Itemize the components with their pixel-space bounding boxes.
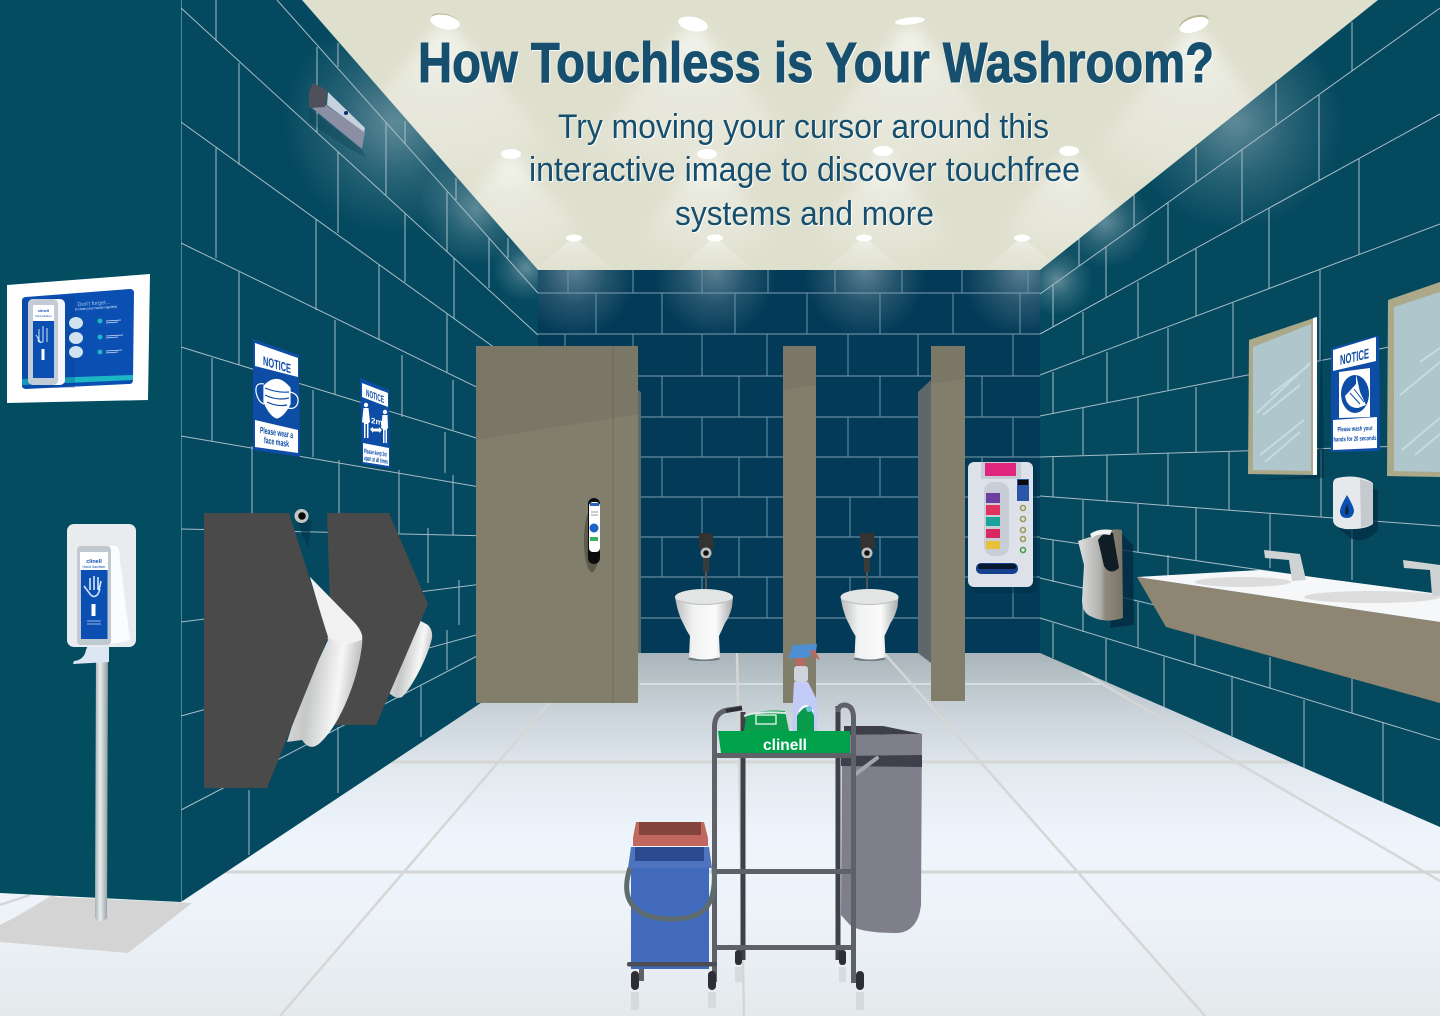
cubicle right side panel and post	[918, 346, 965, 701]
ceiling lights	[429, 11, 1210, 241]
subtitle	[529, 108, 1080, 233]
front wheels	[856, 971, 864, 990]
poster: wash your hands notice	[1331, 335, 1380, 452]
right wall	[1021, 0, 1440, 827]
toilet 2	[840, 533, 898, 661]
laundry bag	[841, 726, 922, 933]
poster: wear a face mask notice	[253, 339, 300, 457]
poster: keep 2m apart notice	[360, 378, 390, 468]
poster: hand hygiene wall poster	[7, 274, 150, 403]
icon: washing hands	[1339, 368, 1370, 418]
bucket handle	[627, 868, 714, 919]
small clinell bottle	[797, 706, 814, 731]
flush valve	[699, 533, 714, 591]
urinal sensor	[294, 509, 312, 548]
poster: wash your hands notice: Please wash your	[1338, 425, 1373, 433]
urinal 2	[388, 620, 432, 698]
red tray	[633, 822, 708, 846]
urinal partition 1	[204, 513, 328, 788]
toilet 1	[675, 533, 733, 661]
ceiling	[302, 0, 1378, 285]
tap 2	[1403, 560, 1440, 596]
hand dryer	[1078, 529, 1134, 628]
floor reflections under wheels	[631, 967, 864, 1010]
floor	[0, 653, 1440, 1016]
poster: hand hygiene wall poster: Hand Sanitiser	[35, 315, 52, 318]
mirror 2	[1387, 282, 1440, 477]
poster: hand hygiene wall poster: to clean your hands regularly	[75, 305, 118, 311]
dispenser body	[67, 524, 136, 647]
mop bucket	[627, 822, 717, 990]
cubicle door	[476, 346, 638, 703]
hand sanitiser dispenser on stand: Hand Sanitiser	[83, 565, 106, 569]
paper towel soap dispenser	[1333, 477, 1378, 540]
poster: wear a face mask notice: Please wear a	[260, 425, 294, 440]
pole	[95, 655, 108, 922]
drip tray	[73, 645, 109, 664]
subtitle: Try moving your cursor around this	[558, 108, 1049, 146]
spray bottle	[788, 644, 820, 731]
front pillar wall	[0, 0, 181, 902]
wipes pack	[744, 711, 789, 731]
green basket with logo: clinell	[763, 737, 807, 754]
condom and sanitary vending machine	[968, 462, 1037, 593]
tap 1	[1264, 550, 1306, 581]
poster: keep 2m apart notice: NOTICE	[366, 388, 384, 406]
icon: two people apart: 2m	[371, 416, 383, 427]
urinal partition 2	[327, 513, 428, 725]
poster: hand hygiene wall poster: Don't forget...	[77, 300, 111, 308]
cubicle post middle	[783, 346, 816, 703]
poster: keep 2m apart notice: apart at all times	[364, 455, 388, 466]
back posts	[743, 706, 838, 960]
subtitle: interactive image to discover touchfree	[529, 151, 1080, 189]
poster: wash your hands notice: NOTICE	[1340, 346, 1369, 369]
poster: wear a face mask notice: NOTICE	[263, 353, 291, 376]
left wall	[181, 0, 560, 902]
cleaning trolley	[708, 644, 922, 990]
hand sanitiser dispenser on stand	[67, 524, 136, 922]
title: How Touchless is Your Washroom?	[418, 31, 1214, 95]
sink counter	[1137, 550, 1440, 703]
cubicle side panel	[638, 390, 641, 653]
trolley frame	[714, 705, 854, 983]
poster: wear a face mask notice: face mask	[264, 435, 290, 449]
poster: wash your hands notice: hands for 20 seconds	[1333, 435, 1377, 444]
door-mounted touch-free sanitiser	[584, 498, 600, 572]
hand sanitiser dispenser on stand: clinell	[86, 559, 102, 565]
subtitle: systems and more	[675, 195, 934, 233]
floor mat	[0, 897, 192, 953]
icon: hand print	[84, 576, 101, 596]
poster: keep 2m apart notice: Please keep 2m	[364, 448, 387, 459]
poster: hand hygiene wall poster: clinell	[38, 309, 49, 313]
green basket with logo	[718, 731, 850, 754]
blue bucket	[628, 847, 712, 969]
mirror 1	[1248, 317, 1324, 480]
urinal 1	[287, 577, 362, 747]
basin	[1195, 577, 1291, 587]
back wall	[538, 270, 1040, 653]
flush valve	[860, 533, 875, 591]
icon: face mask	[256, 379, 298, 418]
ceiling sensor box on wall	[309, 83, 366, 158]
